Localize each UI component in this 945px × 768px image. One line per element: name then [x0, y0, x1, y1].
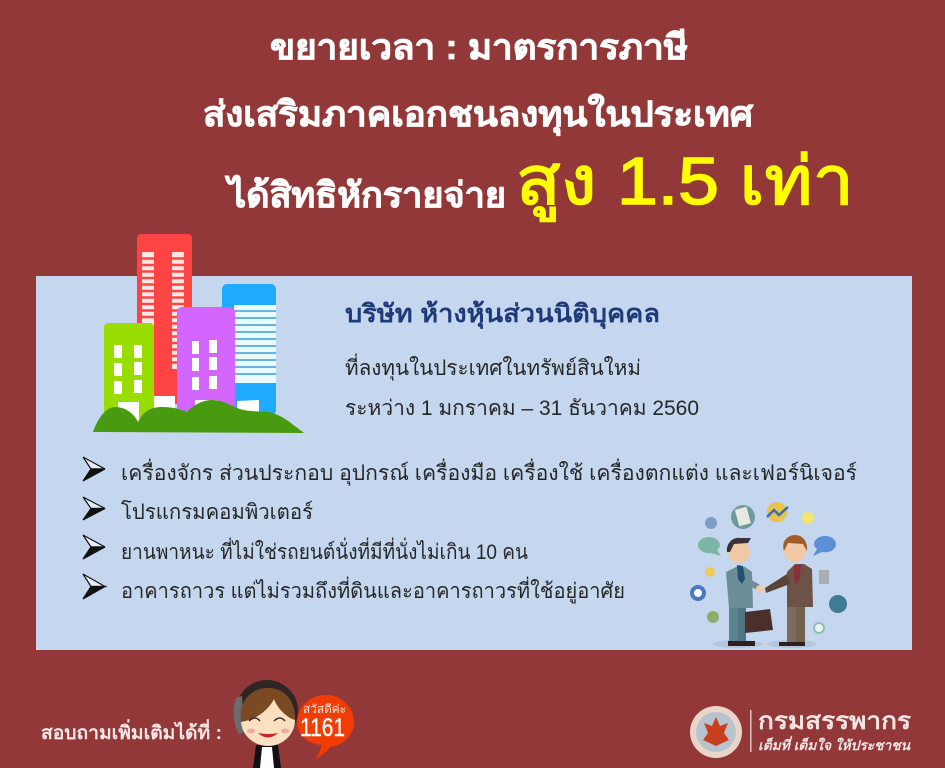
list: eligible assets: [83, 457, 857, 604]
icon: businessmen handshake: [692, 502, 847, 648]
list item: vehicles: ยานพาหนะ ที่ไม่ใช่รถยนต์นั่งที่มีที่นั่งไม่เกิน 10 คน: [121, 537, 528, 564]
title: ส่งเสริมภาคเอกชนลงทุนในประเทศ: [203, 93, 754, 136]
text block: investment period: ที่ลงทุนในประเทศในทรัพย์สินใหม่: [345, 353, 641, 381]
logo: revenue department: เต็มที่ เต็มใจ ให้ประชาชน: [758, 735, 911, 753]
callout: 1161 speech bubble: สวัสดีค่ะ: [303, 702, 346, 716]
logo: revenue department: [690, 706, 911, 758]
left man: [726, 538, 762, 646]
text block: investment period: ระหว่าง 1 มกราคม – 31 ธันวาคม 2560: [345, 397, 699, 420]
icon: call centre agent: [234, 680, 298, 768]
small icons: [731, 505, 755, 529]
list item: buildings: อาคารถาวร แต่ไม่รวมถึงที่ดินและอาคารถาวรที่ใช้อยู่อาศัย: [121, 576, 625, 604]
heading: company type: บริษัท ห้างหุ้นส่วนนิติบุคคล: [345, 300, 660, 330]
panel: background: [36, 276, 912, 650]
logo: revenue department: กรมสรรพากร: [758, 708, 911, 735]
text block: investment period: [345, 353, 699, 420]
icon: city buildings: [93, 234, 304, 433]
title: ขยายเวลา : มาตรการภาษี: [270, 28, 688, 67]
briefcase: [745, 609, 773, 633]
title: สูง 1.5 เท่า: [516, 144, 854, 222]
callout: 1161 speech bubble: 1161: [300, 714, 345, 742]
footer contact label: สอบถามเพิ่มเติมได้ที่ :: [41, 719, 222, 744]
callout: 1161 speech bubble: [297, 695, 354, 759]
right man: [765, 535, 813, 646]
title: [203, 28, 854, 222]
list item: software: [83, 497, 313, 524]
list item: vehicles: [83, 535, 528, 564]
list item: machinery: เครื่องจักร ส่วนประกอบ อุปกรณ์ เครื่องมือ เครื่องใช้ เครื่องตกแต่ง และเฟอร์นิเจอร์: [121, 458, 857, 486]
title: ได้สิทธิหักรายจ่าย: [224, 174, 506, 215]
list item: buildings: [83, 574, 625, 604]
list item: software: โปรแกรมคอมพิวเตอร์: [121, 500, 313, 524]
